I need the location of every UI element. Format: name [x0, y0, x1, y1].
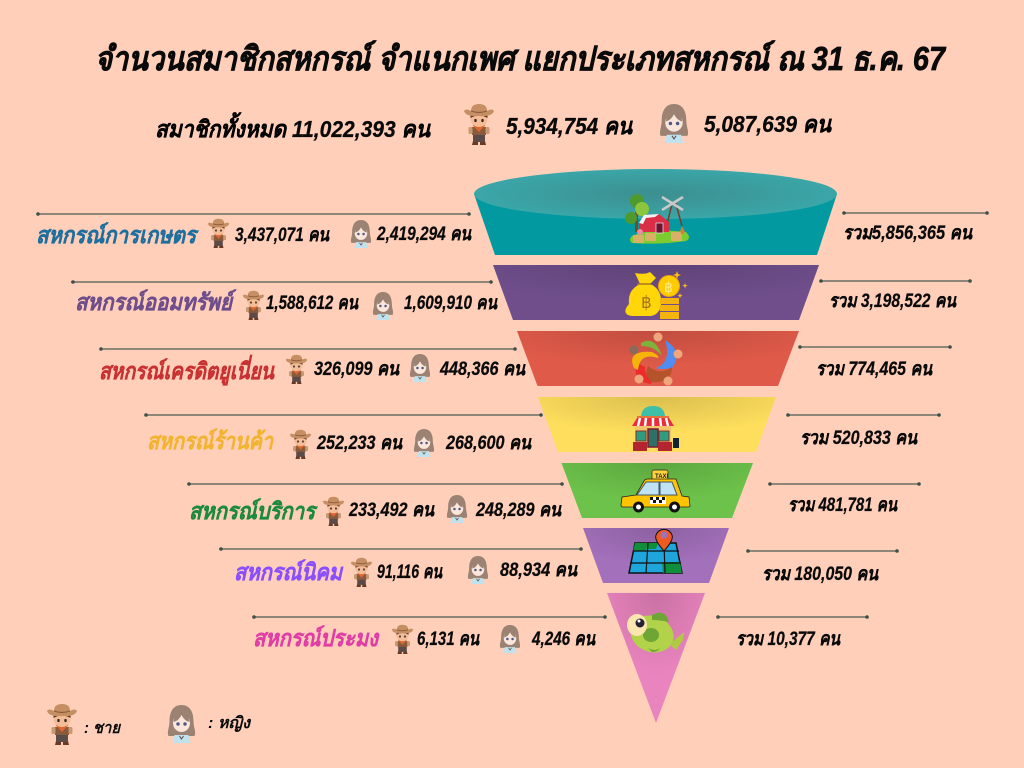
- legend: [47, 704, 251, 745]
- row: settlement: [219, 547, 899, 587]
- icon: man: [323, 497, 344, 526]
- icon: woman: [410, 354, 430, 382]
- row: credit union: [99, 345, 952, 386]
- total: รวม5,856,365 คน: [843, 223, 973, 244]
- funnel layer: savings: [493, 265, 819, 320]
- icon: money bag and coins: ฿: [641, 293, 652, 312]
- category label: สหกรณ์ประมง: [253, 625, 380, 651]
- icon: woman: [500, 625, 520, 653]
- icon: woman: [414, 429, 434, 457]
- leader line left: [36, 212, 471, 216]
- leader line right: [842, 211, 989, 215]
- men count: 3,437,071 คน: [235, 225, 330, 246]
- leader line left: [219, 547, 583, 551]
- icon: fish: [625, 610, 684, 658]
- category label: สหกรณ์นิคม: [234, 559, 344, 585]
- total: รวม 180,050 คน: [762, 564, 879, 585]
- women count: 88,934 คน: [500, 560, 578, 581]
- icon: shop: [632, 406, 679, 451]
- legend label: male: : ชาย: [84, 720, 121, 737]
- funnel layer: agriculture: [474, 169, 837, 255]
- icon: money bag and coins: [625, 271, 688, 319]
- icon: man: [286, 355, 307, 384]
- icon: money bag and coins: ฿: [664, 279, 673, 295]
- leader line right: [746, 549, 899, 553]
- category label: สหกรณ์บริการ: [189, 498, 318, 524]
- row: store: [144, 413, 941, 459]
- leader line right: [786, 413, 941, 417]
- men count: 326,099 คน: [314, 359, 400, 380]
- row: agriculture: [36, 211, 989, 248]
- men count: 252,233 คน: [316, 433, 403, 454]
- leader line left: [71, 280, 493, 284]
- leader line right: [716, 615, 869, 619]
- category label: สหกรณ์ร้านค้า: [147, 428, 274, 454]
- row: service: [187, 482, 921, 526]
- total women: 5,087,639 คน: [704, 111, 832, 137]
- total: รวม 481,781 คน: [788, 495, 898, 516]
- icon: man: [290, 430, 311, 459]
- leader line left: [144, 413, 543, 417]
- women count: 268,600 คน: [445, 433, 532, 454]
- total: รวม 10,377 คน: [736, 629, 841, 650]
- funnel layer: service: [562, 463, 753, 518]
- funnel layer: settlement: [583, 528, 729, 583]
- icon: people circle: [630, 332, 682, 386]
- category label: สหกรณ์การเกษตร: [36, 222, 199, 248]
- icon: woman: [660, 104, 688, 143]
- total: รวม 3,198,522 คน: [829, 291, 957, 312]
- women count: 1,609,910 คน: [404, 293, 498, 314]
- icon: woman: [468, 556, 488, 584]
- leader line left: [252, 615, 607, 619]
- total: รวม 774,465 คน: [816, 359, 933, 380]
- icon: man: [208, 219, 229, 248]
- women count: 448,366 คน: [439, 359, 526, 380]
- category label: สหกรณ์เครดิตยูเนี่ยน: [99, 354, 275, 386]
- icon: man: [47, 704, 77, 745]
- icon: woman: [447, 495, 467, 523]
- women count: 4,246 คน: [531, 629, 596, 650]
- leader line right: [768, 482, 921, 486]
- women count: 2,419,294 คน: [376, 224, 472, 245]
- icon: man: [464, 104, 494, 145]
- total summary: [155, 104, 832, 145]
- total men: 5,934,754 คน: [506, 113, 633, 139]
- leader line left: [99, 347, 517, 351]
- icon: woman: [373, 292, 393, 320]
- icon: woman: [168, 705, 195, 743]
- men count: 6,131 คน: [417, 629, 480, 650]
- total: รวม 520,833 คน: [800, 428, 918, 449]
- men count: 1,588,612 คน: [266, 293, 359, 314]
- funnel layer: credit union: [517, 331, 799, 386]
- row: fisheries: [252, 615, 869, 654]
- leader line right: [819, 279, 972, 283]
- funnel chart: [474, 169, 837, 723]
- legend label: female: : หญิง: [208, 714, 251, 732]
- icon: map pin: [629, 529, 682, 573]
- leader line left: [187, 482, 564, 486]
- icon: man: [243, 291, 264, 320]
- icon: taxi: TAXI: [655, 474, 669, 480]
- icon: farm: [625, 194, 689, 244]
- women count: 248,289 คน: [475, 500, 562, 521]
- icon: man: [392, 625, 413, 654]
- funnel layer: store: [538, 397, 776, 452]
- category label: สหกรณ์ออมทรัพย์: [75, 289, 236, 315]
- total members: สมาชิกทั้งหมด 11,022,393 คน: [155, 112, 431, 142]
- funnel layer: fisheries: [607, 593, 705, 723]
- men count: 233,492 คน: [348, 500, 435, 521]
- men count: 91,116 คน: [377, 562, 443, 583]
- icon: taxi: [621, 470, 690, 512]
- icon: man: [351, 558, 372, 587]
- leader line right: [798, 345, 952, 349]
- row: savings: [71, 279, 972, 320]
- icon: woman: [351, 220, 371, 248]
